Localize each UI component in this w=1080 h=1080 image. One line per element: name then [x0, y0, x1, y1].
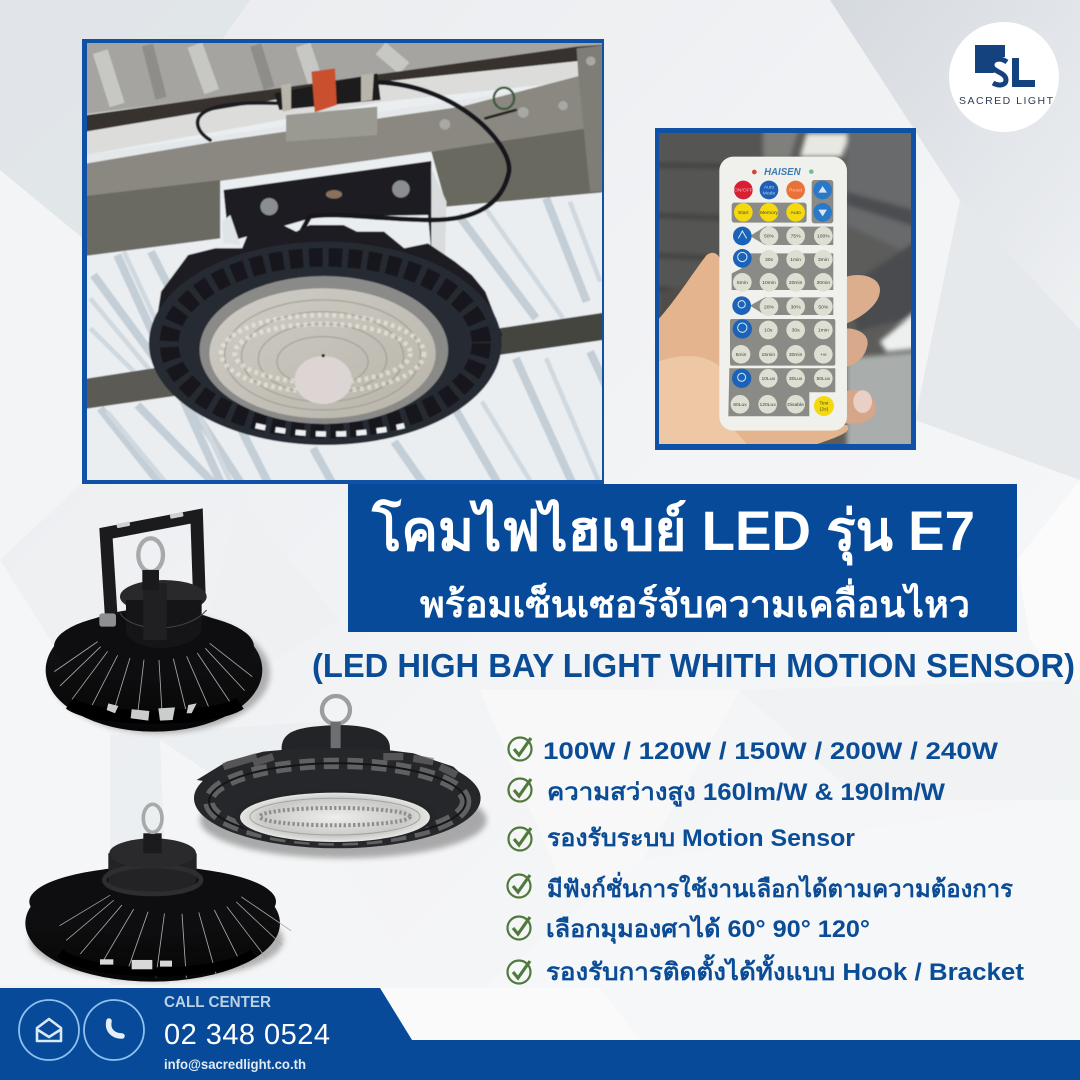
remote buttons: 20min: [789, 280, 803, 286]
footer contact bar: [0, 988, 1080, 1080]
remote buttons: 10s: [764, 328, 773, 334]
remote buttons: 50%: [764, 234, 775, 240]
remote buttons: 5min: [737, 280, 748, 286]
remote buttons: 50Lux: [817, 376, 831, 382]
feature: motion sensor: รองรับระบบ Motion Sensor: [547, 825, 855, 852]
driver housing: [120, 580, 207, 613]
motion sensor dome: [295, 356, 352, 404]
lower purlins: [87, 368, 175, 410]
lens: [235, 790, 435, 843]
remote buttons: 1min: [790, 257, 801, 263]
eye bolt: [322, 696, 350, 724]
feature: wattage: 100W / 120W / 150W / 200W / 240W: [543, 738, 998, 765]
outer ring: [194, 748, 481, 848]
feature: installation: รองรับการติดตั้งได้ทั้งแบบ Hook / Bracket: [546, 953, 1024, 986]
remote buttons: Auto: [791, 210, 801, 216]
remote brand: HAISEN: [764, 167, 802, 178]
bolts: [439, 56, 595, 130]
remote buttons: Memory: [760, 210, 778, 216]
remote buttons: [731, 181, 834, 416]
lamp lens: [200, 276, 448, 424]
lamp heat sink teeth: [158, 224, 502, 337]
icon: check: [508, 874, 530, 898]
remote body: [719, 157, 847, 431]
remote buttons: 120Lux: [759, 402, 776, 408]
title line 1: โคมไฟไฮเบย์ LED รุ่น E7: [371, 498, 975, 566]
remote buttons: 75%: [791, 234, 801, 240]
remote buttons: 5min: [736, 352, 747, 358]
remote buttons: Disable: [787, 402, 804, 408]
remote buttons: 10Lux: [762, 376, 776, 382]
icon: check: [508, 828, 532, 850]
feature: brightness: ความสว่างสูง 160lm/W & 190lm/W: [547, 779, 945, 807]
product image: lamp underside: [194, 696, 487, 858]
blurred background: [659, 133, 911, 444]
remote buttons: ON/OFF: [734, 188, 753, 194]
icon: phone: [84, 1000, 144, 1060]
icon: check: [508, 916, 530, 940]
remote buttons: 30min: [789, 352, 803, 358]
remote brand: [752, 168, 814, 175]
icon: check: [508, 778, 532, 802]
photo: remote control held in hand: [650, 125, 920, 455]
icon: check: [508, 738, 532, 760]
logo: Sacred Light: [949, 22, 1059, 132]
remote buttons: Reset: [789, 188, 803, 194]
remote buttons: 50%: [818, 304, 829, 310]
remote buttons: Auto: [764, 184, 774, 190]
icon: email: [19, 1000, 79, 1060]
roof beam: [87, 76, 584, 196]
bracket: [106, 512, 199, 623]
remote buttons: 3min: [818, 257, 829, 263]
product image: lamp with bracket: [46, 512, 270, 733]
product image: lamp top view: [25, 804, 291, 982]
feature: functions: มีฟังก์ชั่นการใช้งานเลือกได้ตามความต้องการ: [547, 871, 1013, 903]
remote buttons: 20%: [764, 304, 775, 310]
feature list: [508, 738, 1024, 986]
remote buttons: Start: [738, 210, 749, 216]
phone number: 02 348 0524: [164, 1019, 330, 1051]
title banner: [348, 484, 1017, 632]
remote buttons: 10min: [762, 280, 776, 286]
title line 2: พร้อมเซ็นเซอร์จับความเคลื่อนไหว: [420, 578, 970, 625]
eye bolt: [138, 538, 163, 572]
logo: Sacred Light: SACRED LIGHT: [959, 95, 1054, 107]
remote buttons: 15min: [762, 352, 775, 358]
remote buttons: 30s: [765, 257, 774, 263]
remote buttons: 1min: [818, 328, 829, 334]
photo: installed high bay light: [80, 35, 610, 485]
remote buttons: (2s): [820, 406, 829, 412]
remote buttons: 100%: [817, 234, 830, 240]
driver housing: [108, 853, 197, 896]
corrugated roof background: [80, 35, 610, 485]
dark purlin: [80, 44, 610, 133]
remote buttons: +∞: [820, 352, 827, 358]
eye bolt: [143, 804, 162, 832]
hand: [650, 253, 880, 455]
remote buttons: 30%: [791, 304, 801, 310]
cable and junction connector: [198, 82, 516, 232]
remote buttons: Mode: [763, 190, 775, 196]
lamp body: [149, 242, 502, 445]
icon: check: [508, 960, 530, 984]
top housing: [282, 725, 390, 763]
mounting bracket: [224, 161, 431, 252]
email: info@sacredlight.co.th: [164, 1056, 306, 1072]
knob: [99, 613, 116, 627]
feature: beam angle: เลือกมุมองศาได้ 60° 90° 120°: [546, 914, 870, 945]
remote buttons: Test: [819, 400, 829, 406]
ceiling sheet at top: [87, 43, 602, 115]
remote button panels: [728, 180, 835, 416]
remote buttons: 30min: [817, 280, 830, 286]
english subtitle: (LED HIGH BAY LIGHT WHITH MOTION SENSOR): [312, 647, 1075, 684]
call center label: CALL CENTER: [164, 994, 271, 1011]
remote buttons: 30s: [792, 328, 800, 334]
remote buttons: 30Lux: [789, 376, 803, 382]
remote buttons: 80Lux: [733, 402, 747, 408]
